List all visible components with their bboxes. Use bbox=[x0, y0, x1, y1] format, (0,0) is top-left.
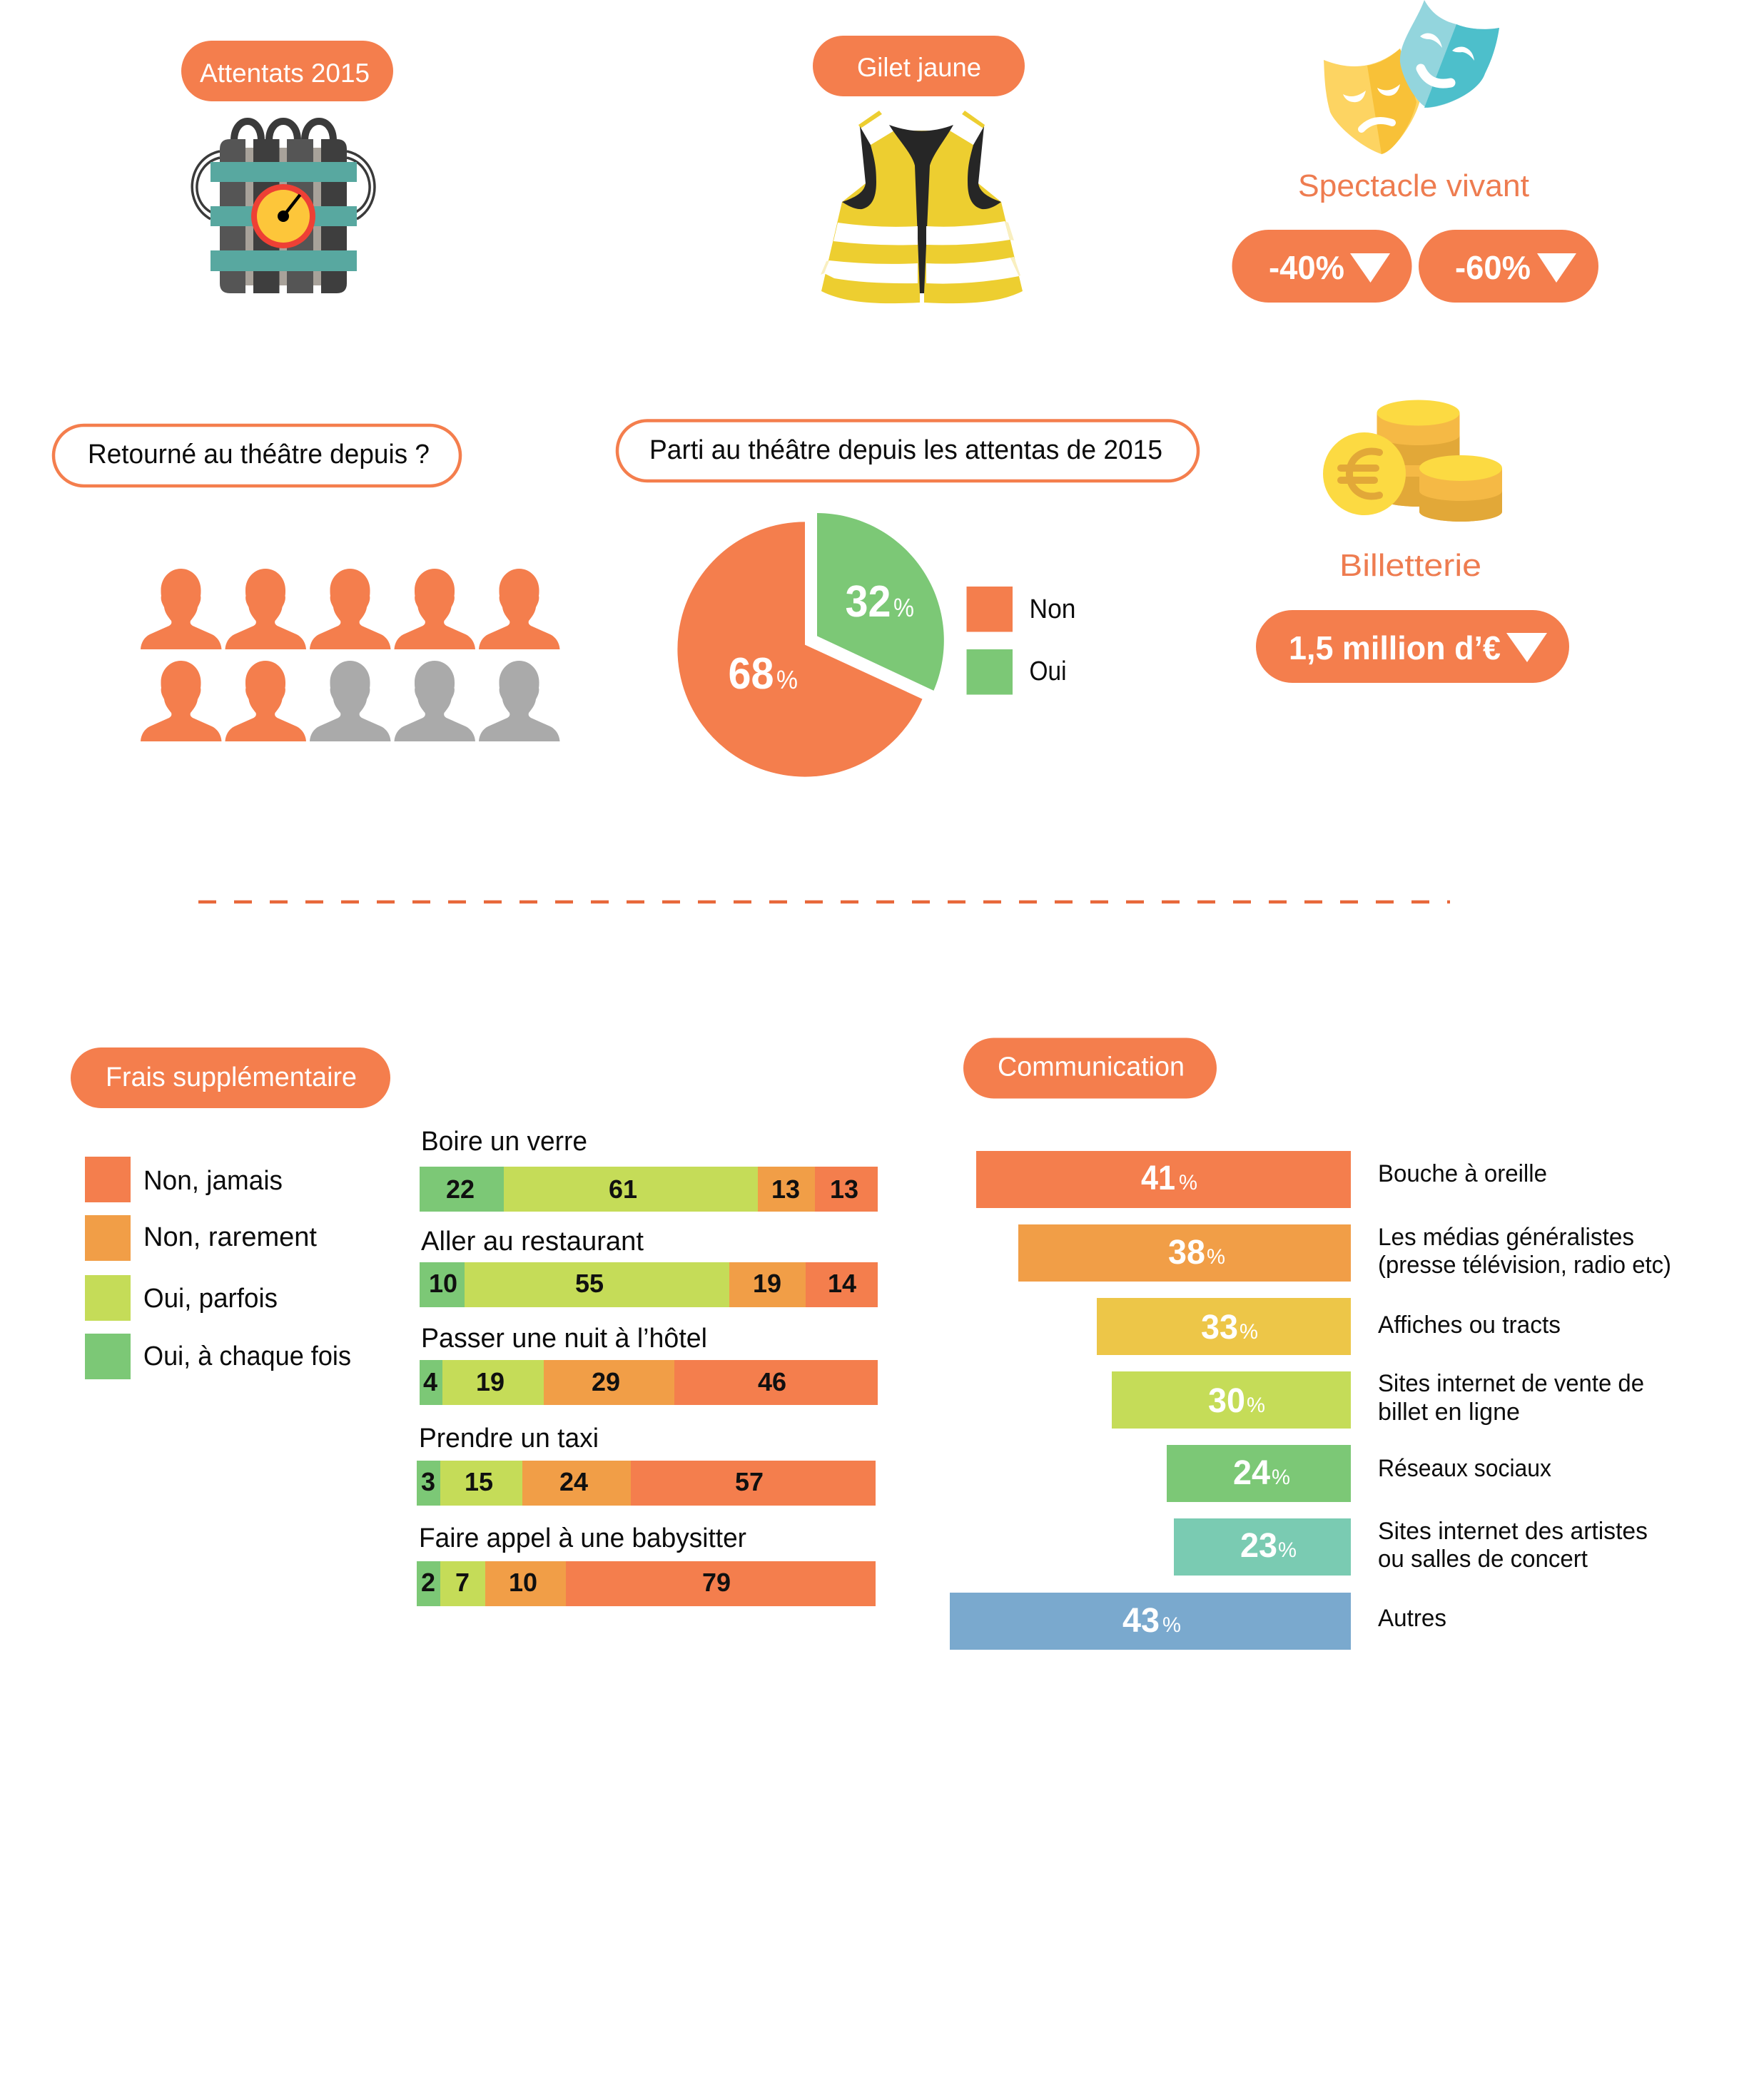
stacked bar: Faire appel à une babysitter: 2 bbox=[421, 1568, 435, 1597]
bar: Sites internet de vente 30%: % bbox=[1247, 1394, 1265, 1417]
legend: frequency: Non, rarement bbox=[143, 1222, 317, 1252]
badge: -60%: -60% bbox=[1455, 249, 1531, 286]
heading pill: Retourné au théâtre depuis ?: Retourné au théâtre depuis ? bbox=[88, 440, 430, 470]
pie chart bbox=[677, 513, 944, 777]
bar: Réseaux sociaux 24%: % bbox=[1272, 1466, 1290, 1489]
bar: Affiches ou tracts 33% bbox=[1097, 1298, 1561, 1355]
heading pill: Communication: Communication bbox=[998, 1052, 1185, 1082]
bar: Les médias généralistes 38% bbox=[1018, 1224, 1671, 1282]
heading pill: Frais supplémentaire bbox=[71, 1047, 390, 1108]
stacked bar: Prendre un taxi: 15 bbox=[465, 1467, 493, 1496]
badge: -40%: -40% bbox=[1269, 249, 1344, 286]
stacked bar: Boire un verre: 13 bbox=[771, 1175, 800, 1204]
stacked bar: Prendre un taxi: 3 bbox=[421, 1467, 435, 1496]
legend: frequency: Oui, parfois bbox=[143, 1284, 278, 1314]
bar: Les médias généralistes 38%: 38 bbox=[1168, 1234, 1205, 1272]
heading pill: Attentats 2015: Attentats 2015 bbox=[200, 59, 370, 88]
stacked bar: Boire un verre: 13 bbox=[830, 1175, 858, 1204]
icon: yellow vest bbox=[821, 111, 1023, 305]
icon: bomb bbox=[192, 121, 375, 293]
bar: Autres 43%: 43 bbox=[1122, 1602, 1160, 1640]
heading pill: Retourné au théâtre depuis ? bbox=[54, 425, 460, 486]
pictogram: ten people bbox=[141, 569, 559, 741]
stacked bar: Faire appel à une babysitter: 79 bbox=[702, 1568, 731, 1597]
bar: Sites internet des artistes 23%: Sites internet des artistes bbox=[1378, 1518, 1648, 1545]
pie legend bbox=[966, 587, 1076, 695]
bar: Réseaux sociaux 24% bbox=[1167, 1445, 1551, 1502]
badge: 1,5 million d'€ bbox=[1256, 610, 1569, 683]
heading pill: Attentats 2015 bbox=[181, 41, 393, 101]
divider: dashed line bbox=[198, 900, 1450, 903]
label: Billetterie: Billetterie bbox=[1339, 548, 1481, 583]
bar: Réseaux sociaux 24%: 24 bbox=[1233, 1454, 1270, 1492]
stacked bar: Faire appel à une babysitter: Faire appel à une babysitter bbox=[419, 1523, 746, 1553]
bar: Sites internet des artistes 23%: ou salles de concert bbox=[1378, 1546, 1588, 1573]
legend: frequency: Non, jamais bbox=[143, 1166, 283, 1196]
bar: Réseaux sociaux 24%: Réseaux sociaux bbox=[1378, 1455, 1551, 1482]
bar: Autres 43%: % bbox=[1162, 1613, 1181, 1637]
icon: theatre masks bbox=[1324, 0, 1499, 154]
label: Spectacle vivant: Spectacle vivant bbox=[1298, 168, 1529, 203]
bar: Sites internet de vente 30%: Sites internet de vente de bbox=[1378, 1370, 1644, 1397]
pie legend: Oui bbox=[1029, 656, 1066, 686]
bar: Sites internet de vente 30%: 30 bbox=[1208, 1382, 1245, 1420]
legend: frequency bbox=[85, 1157, 351, 1379]
bar: Sites internet des artistes 23%: 23 bbox=[1240, 1527, 1277, 1565]
heading pill: Parti au théâtre depuis les attentas de 2015 bbox=[617, 421, 1198, 481]
pie chart: % bbox=[893, 593, 914, 622]
stacked bar: Boire un verre bbox=[420, 1127, 878, 1212]
bar: Bouche à oreille 41% bbox=[976, 1151, 1547, 1208]
heading pill: Parti au théâtre depuis les attentas de 2015: Parti au théâtre depuis les attentas de 2015 bbox=[649, 435, 1162, 465]
heading pill: Gilet jaune: Gilet jaune bbox=[857, 53, 981, 82]
stacked bar: Passer une nuit à l'hôtel: 46 bbox=[758, 1367, 786, 1396]
stacked bar: Aller au restaurant: 14 bbox=[828, 1269, 856, 1298]
stacked bar: Aller au restaurant bbox=[420, 1227, 878, 1307]
stacked bar: Boire un verre: 61 bbox=[609, 1175, 637, 1204]
stacked bar: Prendre un taxi: Prendre un taxi bbox=[419, 1424, 599, 1453]
stacked bar: Aller au restaurant: 19 bbox=[753, 1269, 781, 1298]
stacked bar: Boire un verre: Boire un verre bbox=[421, 1127, 587, 1157]
stacked bar: Prendre un taxi bbox=[417, 1424, 876, 1506]
icon: coins bbox=[1323, 400, 1502, 522]
bar: Sites internet de vente 30%: billet en ligne bbox=[1378, 1399, 1520, 1426]
heading pill: Frais supplémentaire: Frais supplémentaire bbox=[106, 1062, 357, 1092]
badge: -40% bbox=[1232, 230, 1411, 303]
bar: Les médias généralistes 38%: Les médias généralistes bbox=[1378, 1224, 1634, 1251]
stacked bar: Aller au restaurant: 55 bbox=[575, 1269, 604, 1298]
bar: Bouche à oreille 41%: % bbox=[1179, 1171, 1197, 1194]
bar: Affiches ou tracts 33%: 33 bbox=[1201, 1309, 1238, 1346]
stacked bar: Faire appel à une babysitter bbox=[417, 1523, 876, 1606]
stacked bar: Aller au restaurant: Aller au restaurant bbox=[421, 1227, 644, 1257]
heading pill: Communication bbox=[963, 1038, 1217, 1099]
heading pill: Gilet jaune bbox=[813, 36, 1025, 96]
stacked bar: Prendre un taxi: 57 bbox=[735, 1467, 764, 1496]
stacked bar: Boire un verre: 22 bbox=[446, 1175, 475, 1204]
bar: Sites internet des artistes 23%: % bbox=[1278, 1538, 1297, 1562]
pie legend: Non bbox=[1029, 594, 1076, 624]
stacked bar: Passer une nuit à l'hôtel bbox=[420, 1324, 878, 1405]
bar: Affiches ou tracts 33%: % bbox=[1240, 1320, 1258, 1344]
stacked bar: Aller au restaurant: 10 bbox=[429, 1269, 457, 1298]
bar: Affiches ou tracts 33%: Affiches ou tracts bbox=[1378, 1312, 1561, 1339]
stacked bar: Faire appel à une babysitter: 7 bbox=[455, 1568, 470, 1597]
stacked bar: Passer une nuit à l'hôtel: 29 bbox=[592, 1367, 620, 1396]
pie chart: 68 bbox=[728, 649, 774, 699]
bar: Les médias généralistes 38%: (presse télévision, radio etc) bbox=[1378, 1252, 1671, 1279]
bar: Les médias généralistes 38%: % bbox=[1207, 1245, 1225, 1269]
stacked bar: Passer une nuit à l'hôtel: 4 bbox=[423, 1367, 437, 1396]
pie chart: % bbox=[776, 665, 798, 694]
badge: -60% bbox=[1419, 230, 1598, 303]
bar: Bouche à oreille 41%: 41 bbox=[1141, 1160, 1175, 1197]
badge: 1,5 million d'€: 1,5 million d’€ bbox=[1289, 629, 1501, 666]
bar: Sites internet des artistes 23% bbox=[1174, 1518, 1648, 1576]
pie chart: 32 bbox=[845, 577, 891, 626]
bar: Sites internet de vente 30% bbox=[1112, 1370, 1644, 1429]
bar: Autres 43%: Autres bbox=[1378, 1605, 1446, 1632]
bar: Bouche à oreille 41%: Bouche à oreille bbox=[1378, 1160, 1547, 1187]
stacked bar: Passer une nuit à l'hôtel: 19 bbox=[476, 1367, 505, 1396]
stacked bar: Prendre un taxi: 24 bbox=[559, 1467, 588, 1496]
legend: frequency: Oui, à chaque fois bbox=[143, 1341, 351, 1371]
stacked bar: Faire appel à une babysitter: 10 bbox=[509, 1568, 537, 1597]
bar: Autres 43% bbox=[950, 1593, 1446, 1650]
stacked bar: Passer une nuit à l'hôtel: Passer une nuit à l’hôtel bbox=[421, 1324, 707, 1354]
